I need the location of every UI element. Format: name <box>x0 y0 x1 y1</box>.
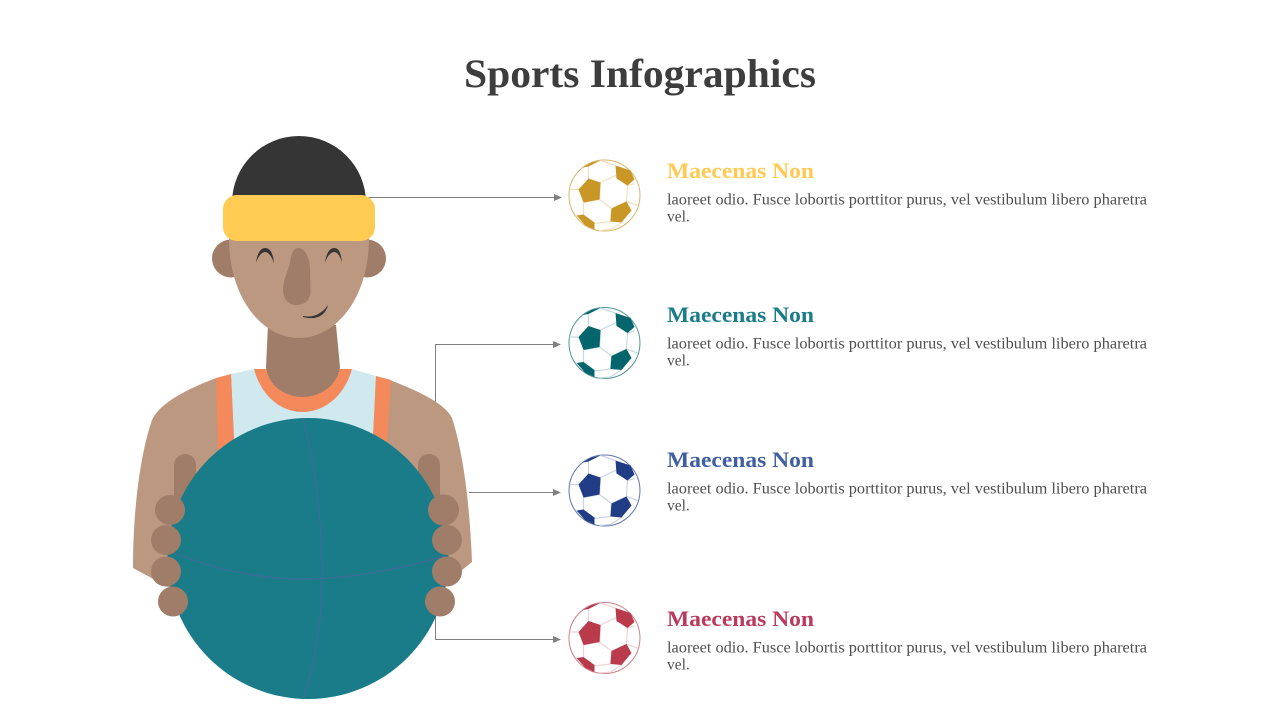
item 2 text: vel. <box>667 352 690 370</box>
connector arrow: headband to gold ball <box>366 194 562 201</box>
item 3 text: vel. <box>667 498 690 514</box>
item 1: gold soccer ball <box>569 160 640 231</box>
head <box>229 238 369 338</box>
jersey collar <box>254 369 352 412</box>
right jersey strap <box>373 376 391 444</box>
headband <box>223 195 375 241</box>
item 4 text <box>667 606 1147 674</box>
connector arrow: shoulder to teal ball <box>436 341 561 405</box>
title: Sports Infographics <box>464 51 816 96</box>
left jersey strap <box>216 374 234 452</box>
item 2 text: laoreet odio. Fusce lobortis porttitor purus, vel vestibulum libero pharetra <box>667 336 1147 352</box>
left ear <box>212 240 250 278</box>
right hand fingers <box>425 494 462 616</box>
connector arrow: ball base to red ball <box>436 610 561 643</box>
hat dome <box>232 136 366 210</box>
right ear <box>348 240 386 278</box>
illustration: player holding ball <box>133 136 472 699</box>
item 1 text: laoreet odio. Fusce lobortis porttitor purus, vel vestibulum libero pharetra <box>667 192 1147 208</box>
left eye <box>256 248 274 263</box>
item 2: teal soccer ball <box>569 308 640 378</box>
nose <box>283 248 310 305</box>
jersey <box>231 369 376 440</box>
left hand fingers <box>151 495 188 616</box>
item 4 text: laoreet odio. Fusce lobortis porttitor purus, vel vestibulum libero pharetra <box>667 640 1147 656</box>
item 4 text: vel. <box>667 656 690 674</box>
left thumb <box>174 454 196 505</box>
item 4 text: Maecenas Non <box>667 606 814 631</box>
item 3: navy soccer ball <box>569 455 640 526</box>
item 3 text: Maecenas Non <box>667 447 814 472</box>
neck <box>266 325 340 397</box>
right eye <box>325 248 342 263</box>
item 1 text: vel. <box>667 208 690 226</box>
smile <box>303 305 328 318</box>
right thumb <box>418 454 440 505</box>
item 1 text <box>667 158 1147 226</box>
connector arrow: hand to navy ball <box>469 489 561 496</box>
basketball <box>168 418 448 699</box>
item 4: red soccer ball <box>569 602 640 674</box>
item 3 text: laoreet odio. Fusce lobortis porttitor purus, vel vestibulum libero pharetra <box>667 480 1147 498</box>
item 3 text <box>667 447 1147 514</box>
item 1 text: Maecenas Non <box>667 158 814 183</box>
item 2 text: Maecenas Non <box>667 302 814 327</box>
item 2 text <box>667 302 1147 370</box>
shoulders and arms <box>133 378 472 588</box>
